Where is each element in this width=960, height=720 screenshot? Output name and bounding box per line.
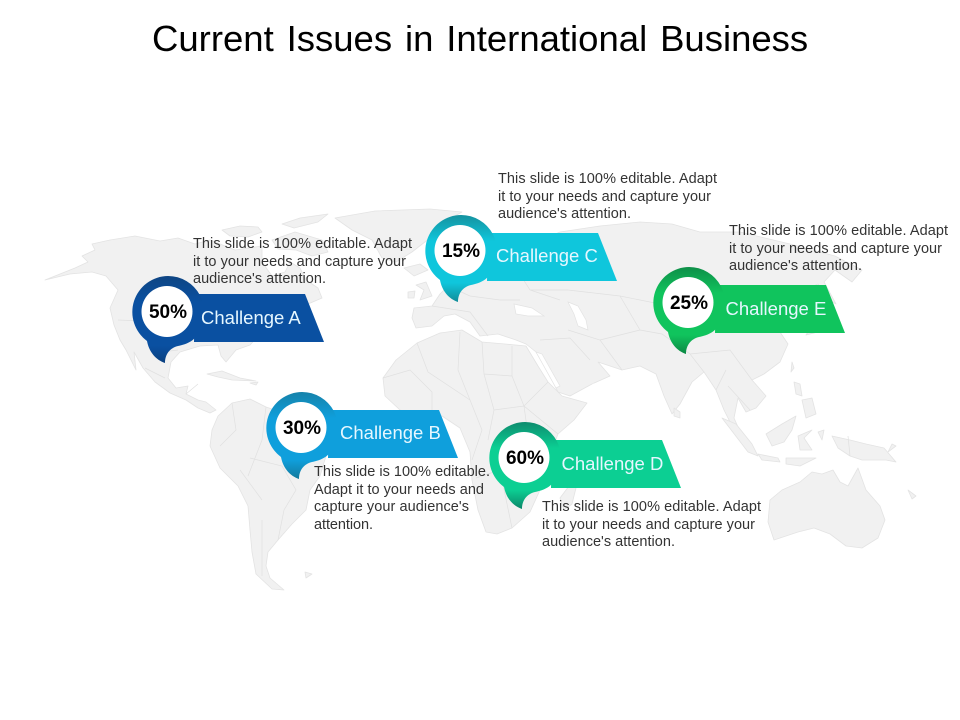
- Sulawesi: [798, 430, 812, 450]
- text block: Challenge A: [193, 236, 412, 287]
- value A: 50%: [149, 302, 187, 323]
- Eurasia: [412, 222, 862, 436]
- Australia: [768, 468, 885, 548]
- text block: Challenge C: audience's attention.: [498, 206, 631, 222]
- banner D: [551, 440, 681, 488]
- Sumatra: [722, 418, 758, 456]
- title: Current Issues in International Business: [152, 18, 808, 59]
- text block: Challenge D: This slide is 100% editable. Adapt: [542, 499, 761, 515]
- Greenland: [335, 209, 462, 262]
- banner C: [487, 233, 617, 281]
- label A: Challenge A: [201, 307, 301, 328]
- text block: Challenge A: it to your needs and capture your: [193, 254, 406, 270]
- white circle C: [434, 225, 486, 276]
- text block: Challenge D: [542, 499, 761, 550]
- text block: Challenge D: it to your needs and capture your: [542, 517, 755, 533]
- Philippines: [794, 382, 802, 396]
- Borneo: [766, 416, 796, 446]
- pin marker E: [653, 267, 725, 354]
- pin: Challenge B: [266, 392, 458, 479]
- text block: Challenge A: audience's attention.: [193, 271, 326, 287]
- pin marker C: [425, 215, 497, 302]
- text block: Challenge B: capture your audience's: [314, 499, 469, 515]
- pin: Challenge A: [132, 276, 324, 363]
- pin: Challenge E: [653, 267, 845, 354]
- text block: Challenge B: attention.: [314, 517, 373, 533]
- Black Sea and Caspian Sea: [462, 302, 612, 388]
- white circle E: [662, 277, 714, 328]
- Sri Lanka: [674, 408, 680, 418]
- banner B: [328, 410, 458, 458]
- text block: Challenge D: audience's attention.: [542, 534, 675, 550]
- banner A: [194, 294, 324, 342]
- pin: Challenge C: [425, 215, 617, 302]
- Cuba: [207, 371, 256, 381]
- pin: Challenge D: [489, 422, 681, 509]
- North America: [45, 236, 322, 413]
- pin marker B: [266, 392, 338, 479]
- text block: Challenge A: This slide is 100% editable. Adapt: [193, 236, 412, 252]
- banner E: [715, 285, 845, 333]
- Madagascar: [560, 480, 578, 510]
- text block: Challenge C: [498, 171, 717, 222]
- world map: [45, 209, 916, 590]
- New Guinea: [832, 436, 896, 462]
- white circle A: [142, 286, 192, 337]
- Baffin Island: [272, 232, 328, 256]
- Africa: [383, 330, 587, 534]
- New Zealand: [908, 490, 916, 499]
- text block: Challenge B: This slide is 100% editable.: [314, 464, 490, 480]
- text block: Challenge E: [729, 223, 948, 274]
- value E: 25%: [670, 293, 708, 314]
- text block: Challenge C: it to your needs and capture your: [498, 189, 711, 205]
- UK: [416, 282, 432, 300]
- text block: Challenge E: audience's attention.: [729, 258, 862, 274]
- value B: 30%: [283, 418, 321, 439]
- Arctic Canada: [222, 226, 262, 237]
- label C: Challenge C: [496, 245, 598, 266]
- text block: Challenge B: Adapt it to your needs and: [314, 482, 484, 498]
- pin marker D: [489, 422, 561, 509]
- text block: Challenge B: [314, 464, 490, 533]
- white circle B: [276, 402, 326, 453]
- value D: 60%: [506, 448, 544, 469]
- pin marker A: [132, 276, 204, 363]
- Japan: [806, 306, 828, 335]
- Ellesmere: [282, 214, 328, 228]
- South America: [210, 399, 326, 590]
- label E: Challenge E: [726, 298, 826, 319]
- Taiwan: [791, 362, 794, 372]
- value C: 15%: [442, 241, 480, 262]
- Java: [758, 454, 780, 462]
- text block: Challenge C: This slide is 100% editable. Adapt: [498, 171, 717, 187]
- label D: Challenge D: [562, 453, 663, 474]
- text block: Challenge E: it to your needs and capture your: [729, 241, 942, 257]
- Iceland: [404, 264, 428, 276]
- label B: Challenge B: [340, 422, 441, 443]
- text block: Challenge E: This slide is 100% editable. Adapt: [729, 223, 948, 239]
- white circle D: [498, 432, 550, 483]
